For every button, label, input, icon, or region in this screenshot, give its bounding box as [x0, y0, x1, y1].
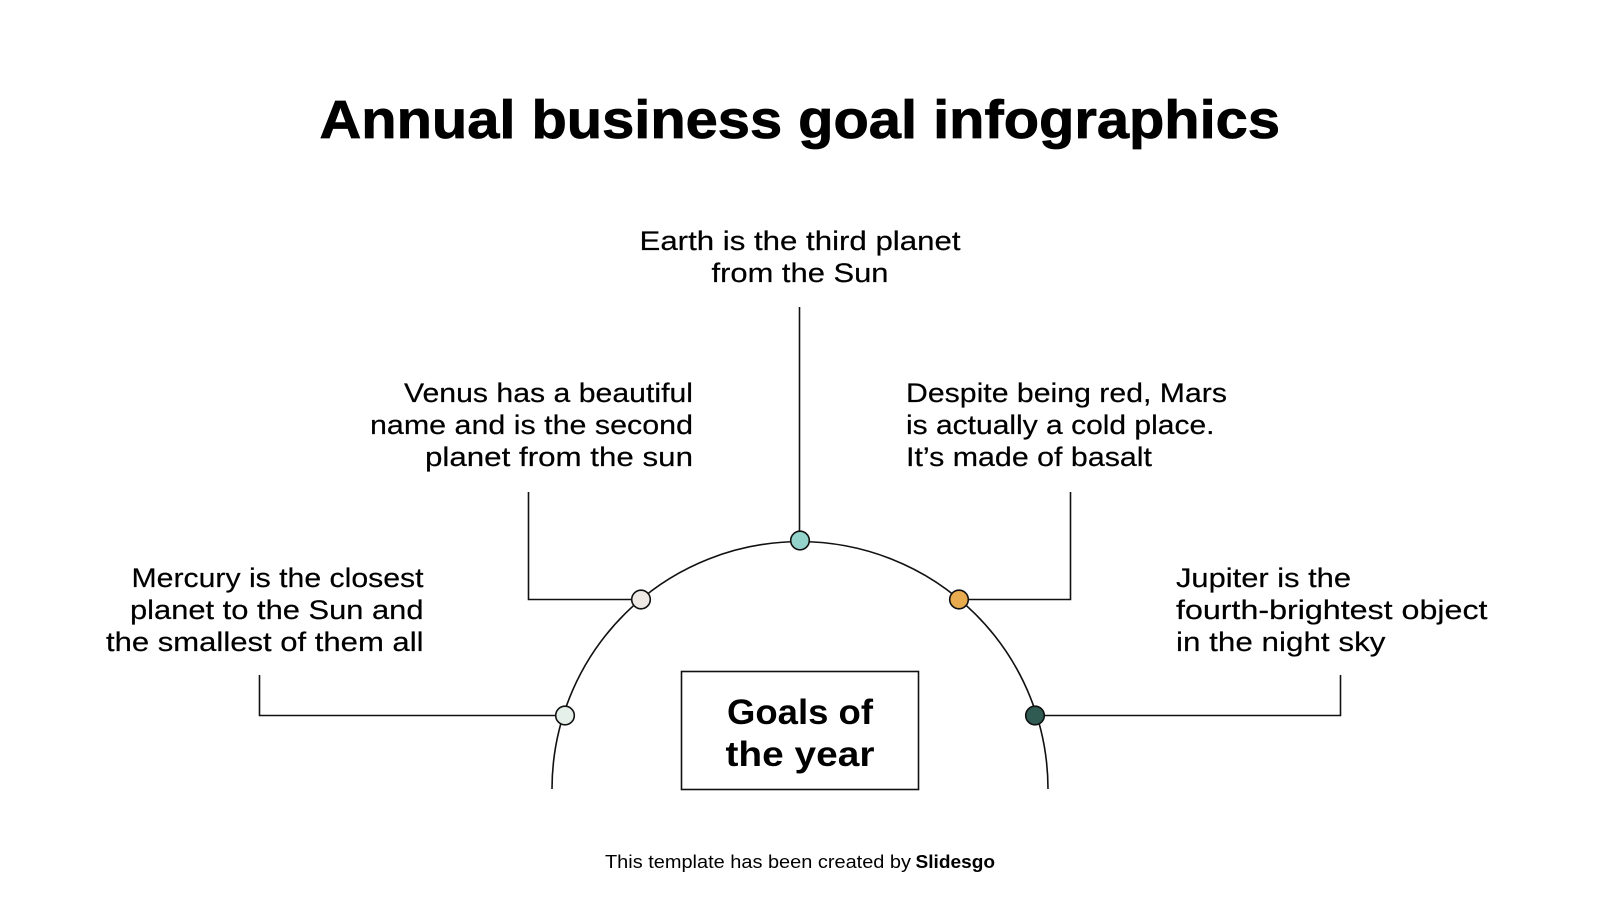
text block: Mars: is actually a cold place.: [906, 410, 1214, 440]
connector: Jupiter: [1044, 675, 1340, 716]
connector: Earth: [798, 307, 800, 531]
text block: Venus: name and is the second: [370, 410, 693, 440]
text block: Earth: [640, 226, 961, 288]
text block: Venus: [370, 378, 693, 472]
center box: Goals of the year: the year: [726, 735, 875, 774]
semicircle arc: [552, 542, 1048, 789]
text block: Jupiter: Jupiter is the: [1176, 563, 1351, 593]
text block: Mercury: [106, 563, 424, 657]
text block: Jupiter: [1176, 563, 1488, 657]
dot: Earth: [791, 531, 809, 550]
text block: Mars: Despite being red, Mars: [906, 378, 1227, 408]
center box: Goals of the year: [682, 672, 918, 790]
center box: Goals of the year: Goals of: [727, 693, 873, 732]
footer credit: Slidesgo: [916, 852, 995, 872]
text block: Jupiter: in the night sky: [1176, 627, 1386, 657]
text block: Mercury: Mercury is the closest: [132, 563, 424, 593]
text block: Venus: Venus has a beautiful: [404, 378, 693, 408]
dot: Mercury: [556, 706, 574, 725]
dot: Jupiter: [1026, 706, 1044, 725]
text block: Mercury: the smallest of them all: [106, 627, 424, 657]
text block: Jupiter: fourth-brightest object: [1176, 595, 1488, 625]
text block: Earth: from the Sun: [712, 258, 888, 288]
dot: Mars: [950, 590, 968, 609]
title: Annual business goal infographics: [320, 90, 1280, 150]
connector: Mars: [968, 492, 1070, 600]
text block: Earth: Earth is the third planet: [640, 226, 961, 256]
text block: Mars: It’s made of basalt: [906, 442, 1153, 472]
connector: Mercury: [260, 675, 556, 716]
dot: Venus: [632, 590, 650, 609]
footer credit: This template has been created by: [605, 852, 911, 872]
text block: Mercury: planet to the Sun and: [130, 595, 424, 625]
text block: Venus: planet from the sun: [425, 442, 693, 472]
connector: Venus: [528, 492, 632, 600]
text block: Mars: [906, 378, 1227, 472]
